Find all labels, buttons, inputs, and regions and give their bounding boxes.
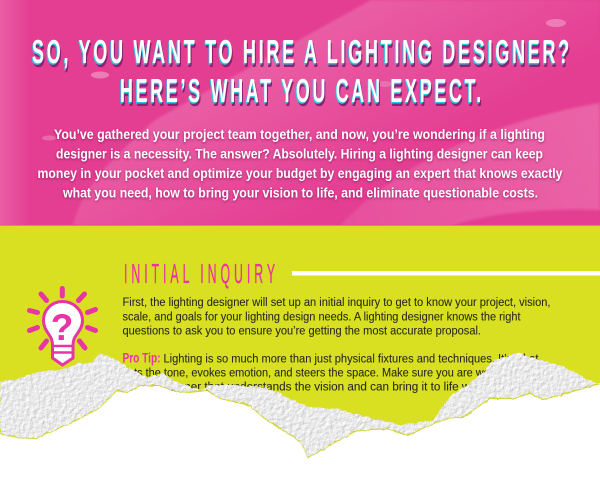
text block: pro tip: with a designer that understands the vision and can bring it to life with ease. xyxy=(122,380,514,394)
title xyxy=(32,33,572,109)
intro text block: You’ve gathered your project team together, and now, you’re wondering if a lighting xyxy=(54,127,545,142)
intro text block: what you need, how to bring your vision to life, and eliminate questionable costs. xyxy=(62,186,538,200)
panel: yellow-green section xyxy=(0,226,600,466)
white rule beside heading xyxy=(292,271,600,276)
intro text block: money in your pocket and optimize your budget by engaging an expert that knows exactly xyxy=(38,166,563,181)
text block: first paragraph: scale, and goals for your lighting design needs. A lighting designer knows the right xyxy=(122,310,521,324)
text block: first paragraph xyxy=(122,295,550,338)
text block: pro tip: sets the tone, evokes emotion, and steers the space. Make sure you are working xyxy=(122,366,514,380)
panel: white page below the torn edge xyxy=(0,384,600,500)
torn paper rim xyxy=(0,353,600,458)
intro text block xyxy=(38,127,563,200)
icon: light bulb with question mark xyxy=(30,288,96,365)
panel: pink header background xyxy=(0,0,600,226)
text block: pro tip xyxy=(122,350,539,394)
text block: first paragraph: First, the lighting designer will set up an initial inquiry to get to know your project, vision, xyxy=(122,295,550,309)
torn paper strip xyxy=(0,353,600,457)
text: INITIAL INQUIRY xyxy=(124,258,279,289)
icon: light bulb with question mark: ? xyxy=(51,307,73,348)
text block: pro tip: Pro Tip: xyxy=(122,350,160,366)
text block: first paragraph: questions to ask you to ensure you’re getting the most accurate proposal. xyxy=(122,324,481,338)
text block: pro tip: Lighting is so much more than just physical fixtures and techniques. It’s what xyxy=(164,352,539,366)
intro text block: designer is a necessity. The answer? Absolutely. Hiring a lighting designer can keep xyxy=(56,146,543,162)
